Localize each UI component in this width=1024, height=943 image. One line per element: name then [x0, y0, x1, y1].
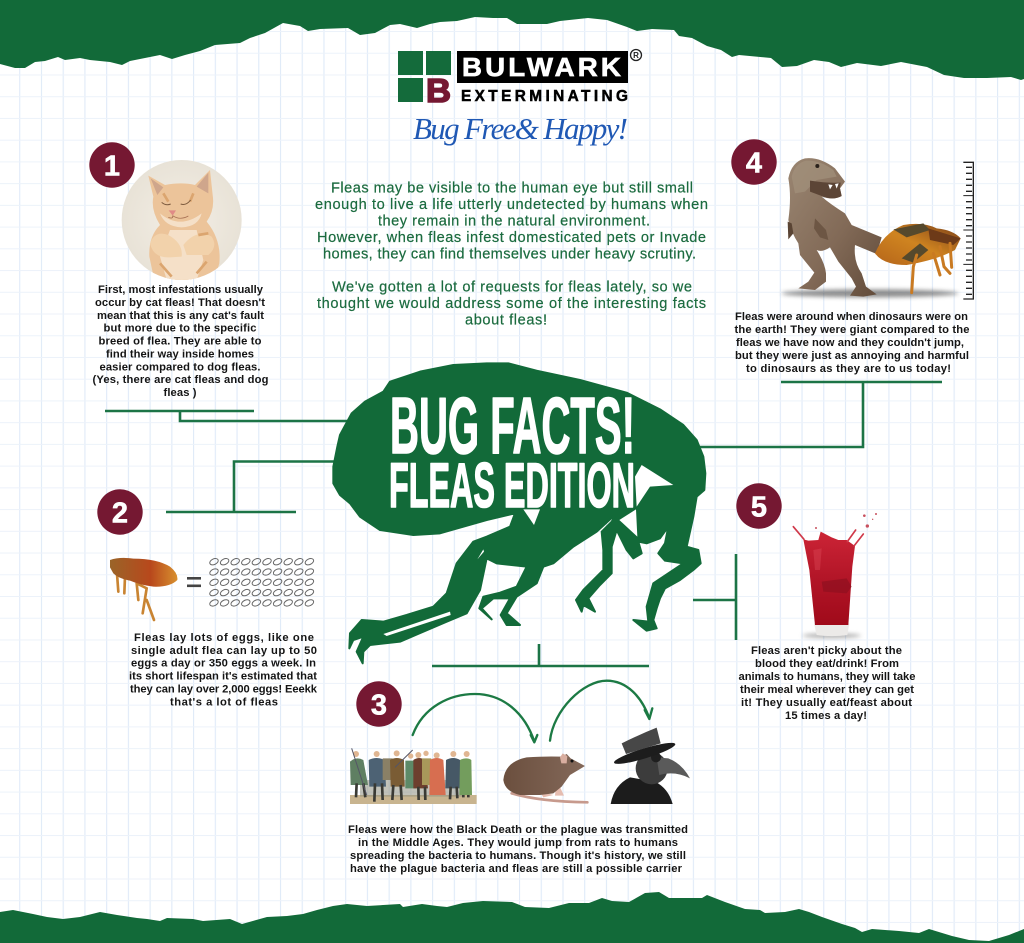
text: fact 4: to dinosaurs as they are to us today! [746, 363, 951, 375]
title: Bug Facts! Fleas Edition: BUG FACTS! [390, 381, 635, 470]
logo: Bulwark Exterminating: BULWARK [462, 52, 624, 82]
text: fact 2: they can lay over 2,000 eggs! Eeekk [130, 684, 318, 696]
medieval crowd illustration [350, 748, 477, 804]
ruler [963, 162, 973, 299]
text: fact 3: spreading the bacteria to humans. Though it's history, we still [350, 850, 686, 862]
torn green top band [0, 0, 1024, 80]
connector lines [105, 382, 942, 666]
intro text: However, when fleas infest domesticated pets or Invade [317, 230, 706, 246]
text: fact 1 [92, 284, 269, 399]
logo: Bulwark Exterminating: B [426, 72, 451, 109]
text: fact 2 [129, 632, 318, 708]
text: fact 2: single adult flea can lay up to 50 [131, 645, 317, 657]
torn green bottom band [0, 892, 1024, 943]
number badge 4 [731, 139, 777, 185]
flea equals eggs illustration [110, 557, 315, 620]
text: fact 3: Fleas were how the Black Death or the plague was transmitted [348, 824, 688, 836]
title: Bug Facts! Fleas Edition: FLEAS EDITION [389, 451, 635, 521]
number badge 3: 3 [371, 690, 387, 722]
number badge 2: 2 [112, 498, 128, 530]
red drink illustration [793, 513, 877, 638]
intro text: homes, they can find themselves under heavy scrutiny. [323, 246, 696, 262]
text: fact 1: easier compared to dog fleas. [100, 361, 260, 373]
intro text: Fleas may be visible to the human eye but still small [331, 180, 693, 196]
text: fact 1: find their way inside homes [106, 348, 254, 360]
text: fact 2: Fleas lay lots of eggs, like one [134, 632, 314, 644]
title: Bug Facts! Fleas Edition [389, 381, 635, 521]
text: fact 1: First, most infestations usually [98, 284, 264, 296]
number badge 5 [736, 483, 782, 529]
text: fact 1: occur by cat fleas! That doesn't [95, 297, 265, 309]
text: fact 3: have the plague bacteria and fleas are still a possible carrier [350, 863, 683, 875]
central flea silhouette [333, 363, 705, 663]
t-rex and giant flea illustration [782, 158, 973, 299]
number badge 5: 5 [751, 492, 767, 524]
text: fact 2: that's a lot of fleas [170, 696, 278, 708]
text: fact 2: eggs a day or 350 eggs a week. In [131, 658, 316, 670]
text: fact 1: fleas ) [164, 387, 197, 399]
text: fact 4: fleas we have now and they couldn't jump, [736, 337, 964, 349]
number badge 1: 1 [104, 150, 120, 182]
intro text: about fleas! [465, 312, 547, 328]
text: fact 4: but they were just as annoying and harmful [735, 350, 969, 362]
intro text: We've gotten a lot of requests for fleas lately, so we [332, 280, 692, 296]
logo: Bulwark Exterminating [398, 50, 642, 109]
plague doctor illustration [611, 728, 690, 804]
text: fact 3 [348, 824, 688, 875]
text: fact 5: animals to humans, they will take [738, 671, 916, 683]
number badge 3 [356, 681, 402, 727]
number badge 4: 4 [746, 148, 762, 180]
text: fact 4: the earth! They were giant compared to the [734, 324, 970, 336]
number badge 2 [97, 489, 143, 535]
text: fact 5: it! They usually eat/feast about [741, 697, 912, 709]
text: fact 5: blood they eat/drink! From [755, 658, 899, 670]
text: fact 4 [734, 311, 970, 375]
text: fact 3: in the Middle Ages. They would jump from rats to humans [358, 837, 678, 849]
intro text: they remain in the natural environment. [378, 214, 650, 230]
tagline: Bug Free& Happy! [413, 111, 628, 146]
text: fact 1: (Yes, there are cat fleas and dog [92, 374, 269, 386]
text: fact 2: its short lifespan it's estimated that [129, 670, 317, 682]
cat photo [122, 160, 242, 283]
rat illustration [503, 753, 587, 802]
text: fact 1: mean that this is any cat's fault [97, 310, 264, 322]
intro text [315, 180, 708, 328]
text: fact 5: their meal wherever they can get [740, 684, 914, 696]
text: fact 5 [738, 645, 916, 722]
logo: Bulwark Exterminating: EXTERMINATING [461, 88, 628, 105]
text: fact 5: Fleas aren't picky about the [751, 645, 902, 657]
intro text: thought we would address some of the interesting facts [317, 296, 706, 312]
text: fact 4: Fleas were around when dinosaurs were on [735, 311, 968, 323]
text: fact 1: but more due to the specific [104, 323, 256, 335]
text: fact 1: breed of flea. They are able to [98, 336, 262, 348]
number badge 1 [89, 142, 135, 188]
logo: Bulwark Exterminating: R [633, 51, 639, 60]
arrows: humans to rat to plague doctor [413, 681, 652, 742]
text: fact 5: 15 times a day! [785, 710, 867, 722]
intro text: enough to live a life utterly undetected by humans when [315, 197, 708, 213]
